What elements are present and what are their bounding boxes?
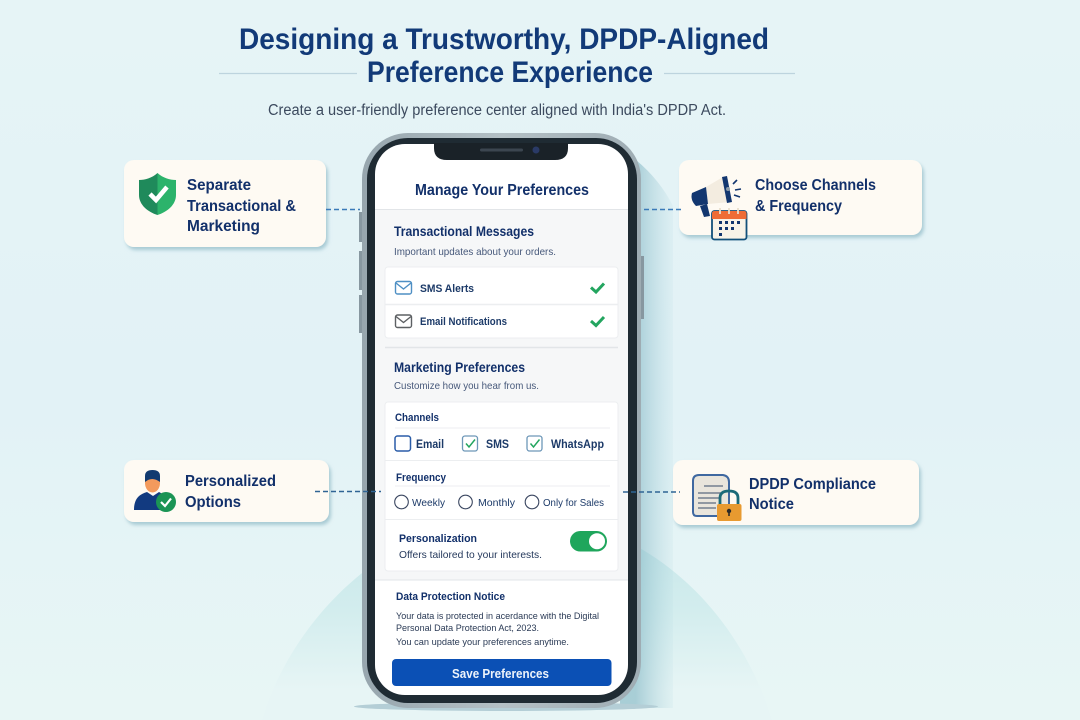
callout: dpdp compliance notice	[673, 460, 919, 525]
callout: separate transactional and marketing: Marketing	[187, 218, 260, 235]
frequency: Only for Sales	[543, 497, 604, 509]
marketing section	[385, 360, 618, 571]
save button: Save Preferences	[452, 667, 549, 681]
icon: sms mail	[396, 282, 412, 294]
connector: bottom left	[315, 490, 381, 492]
icon: document with lock	[693, 475, 742, 521]
transactional section: Important updates about your orders.	[394, 246, 556, 258]
callout: choose channels and frequency	[679, 160, 922, 240]
icon: calendar	[712, 208, 746, 240]
notch	[434, 143, 568, 160]
phone cast shadow	[620, 160, 673, 708]
frequency: Monthly	[478, 497, 516, 509]
connector: bottom right	[623, 491, 680, 493]
channels: Email	[416, 439, 444, 451]
channels: Channels	[395, 412, 439, 424]
frequency	[395, 472, 604, 509]
title: Preference Experience	[367, 56, 653, 89]
data protection notice	[396, 591, 599, 648]
icon: email	[396, 315, 412, 328]
icon: person with check	[134, 470, 176, 512]
screen heading: Manage Your Preferences	[415, 182, 589, 199]
phone body	[362, 133, 641, 708]
check marks	[591, 284, 604, 326]
channels	[395, 412, 604, 451]
personalization: Personalization	[399, 533, 477, 545]
personalization: Offers tailored to your interests.	[399, 549, 542, 561]
personalization	[399, 531, 607, 561]
background hill	[262, 515, 772, 720]
frequency: Weekly	[412, 497, 446, 509]
toggle	[570, 531, 607, 552]
callout: dpdp compliance notice: DPDP Compliance	[749, 476, 876, 493]
data protection notice: Your data is protected in acerdance with the Digital	[396, 611, 599, 622]
callout: choose channels and frequency: & Frequency	[755, 198, 842, 215]
data protection notice: Data Protection Notice	[396, 591, 505, 603]
transactional section: Email Notifications	[420, 316, 507, 328]
callout: separate transactional and marketing: Separate	[187, 177, 251, 194]
save button	[392, 659, 612, 686]
data protection notice: Personal Data Protection Act, 2023.	[396, 623, 539, 634]
channels: SMS	[486, 439, 509, 451]
connector: top left	[326, 208, 360, 210]
phone side buttons	[359, 212, 644, 333]
callout: personalized options: Personalized	[185, 473, 276, 490]
phone screen	[375, 143, 628, 695]
transactional section	[385, 224, 618, 338]
transactional section: SMS Alerts	[420, 283, 474, 295]
title	[239, 23, 769, 89]
icon: megaphone	[692, 176, 741, 217]
callout: separate transactional and marketing	[124, 160, 326, 247]
phone	[359, 133, 644, 708]
callout: personalized options	[124, 460, 329, 522]
callout: choose channels and frequency: Choose Channels	[755, 177, 876, 194]
marketing section: Marketing Preferences	[394, 360, 525, 375]
callout: separate transactional and marketing: Transactional &	[187, 198, 296, 215]
frequency: Frequency	[396, 472, 447, 484]
transactional section: Transactional Messages	[394, 224, 534, 239]
phone ground shadow	[354, 702, 658, 711]
callout: personalized options: Options	[185, 494, 241, 511]
icon: shield	[139, 173, 176, 215]
connector: top right	[644, 208, 681, 210]
channels: WhatsApp	[551, 439, 604, 451]
data protection notice: You can update your preferences anytime.	[396, 637, 569, 648]
title: Designing a Trustworthy, DPDP-Aligned	[239, 23, 769, 56]
subtitle: Create a user-friendly preference center aligned with India's DPDP Act.	[268, 102, 726, 119]
marketing section: Customize how you hear from us.	[394, 380, 539, 392]
callout: dpdp compliance notice: Notice	[749, 496, 794, 513]
